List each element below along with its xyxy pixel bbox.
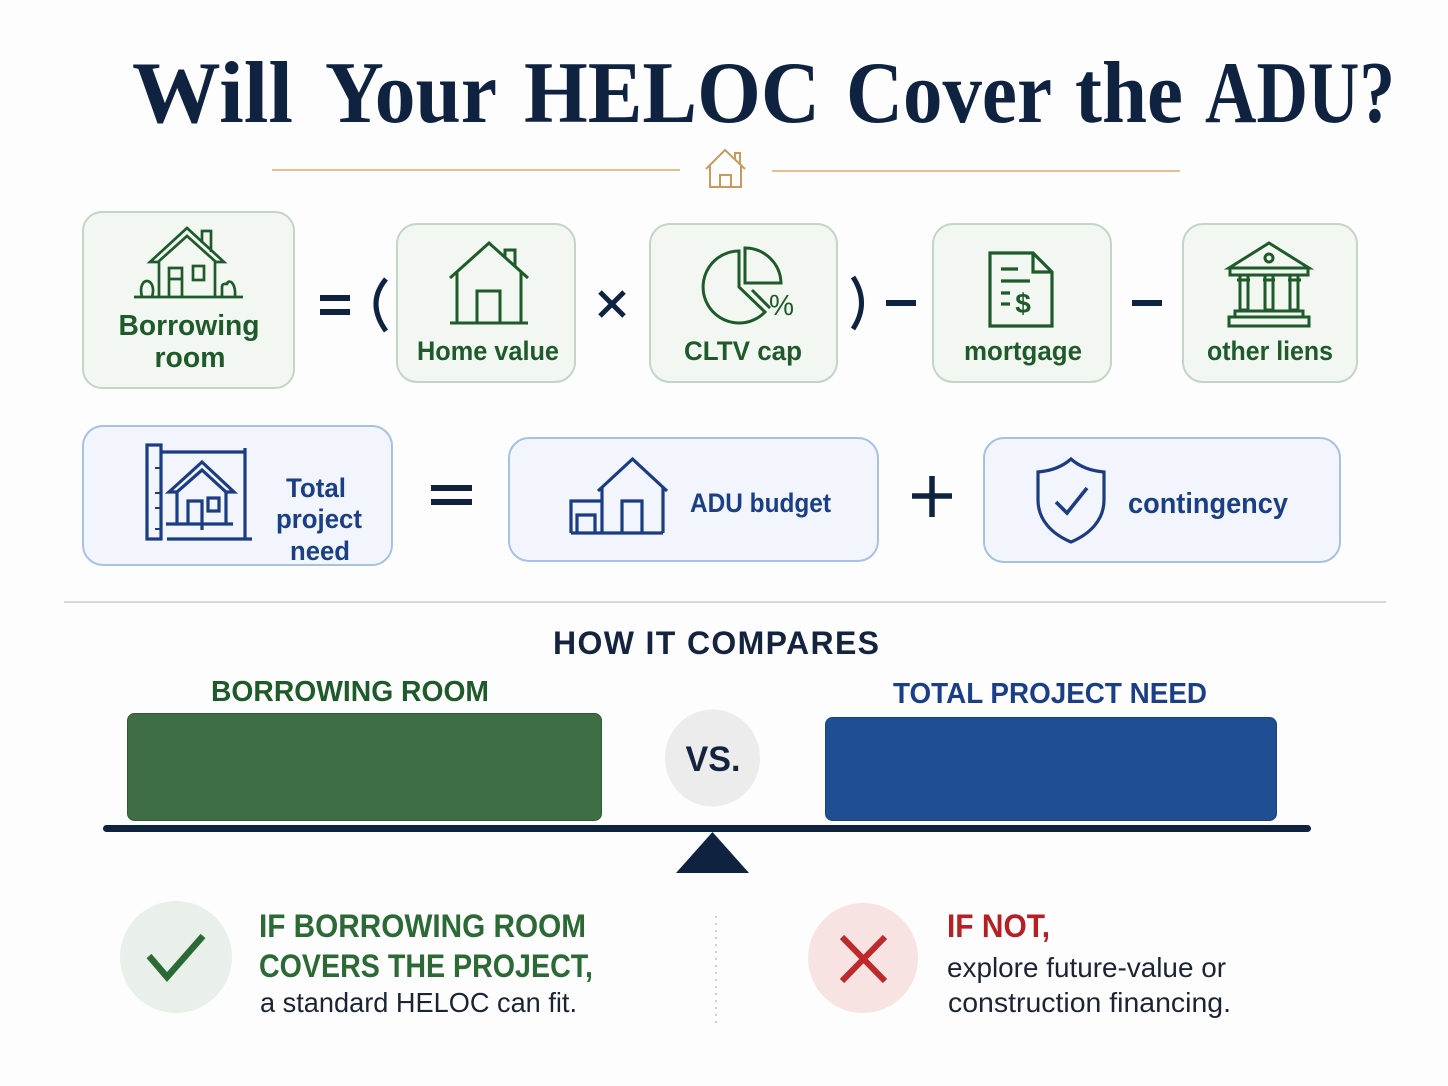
panel: borrowing room <box>83 212 294 388</box>
label: borrowing room: Borrowing <box>118 310 260 342</box>
label: mortgage: mortgage <box>964 336 1082 366</box>
heading: how it compares: HOW IT COMPARES <box>553 625 879 661</box>
icon: red x <box>808 903 918 1013</box>
label: other liens: other liens <box>1207 336 1333 366</box>
operator: multiply <box>600 292 624 316</box>
title <box>132 45 1395 142</box>
text: standard HELOC can fit <box>259 908 593 1018</box>
icon: house blueprint <box>147 445 252 539</box>
label: contingency: contingency <box>1128 488 1288 520</box>
text: standard HELOC can fit: a standard HELOC can fit. <box>260 987 577 1018</box>
title: Your <box>325 45 497 142</box>
label: ADU budget: ADU budget <box>690 488 831 518</box>
comparison: total project need bar: TOTAL PROJECT NEED <box>893 678 1207 710</box>
text: explore alternatives: IF NOT, <box>947 908 1050 944</box>
comparison: borrowing room bar: BORROWING ROOM <box>211 676 489 708</box>
text: standard HELOC can fit: IF BORROWING ROOM <box>259 908 586 944</box>
title: HELOC <box>524 45 820 142</box>
panel: ADU budget <box>509 438 878 561</box>
balance scale beam and fulcrum <box>103 825 1311 873</box>
comparison: vs badge <box>665 710 760 806</box>
title: the <box>1075 45 1183 142</box>
operator: minus <box>1132 300 1162 306</box>
label: home value: Home value <box>417 336 559 366</box>
comparison: vs badge: VS. <box>686 740 740 779</box>
panel: borrowing room: room <box>154 342 226 374</box>
text: explore alternatives <box>947 908 1231 1018</box>
panel: CLTV cap <box>650 224 837 382</box>
icon: pie chart with percent <box>703 248 794 323</box>
title: Will <box>132 45 293 142</box>
panel: total project need: project <box>276 504 362 534</box>
panel: total project need: need <box>290 536 350 566</box>
operator: plus <box>912 476 952 517</box>
icon: house with bushes <box>134 228 243 297</box>
operator: close parenthesis and minus <box>853 277 916 329</box>
operator: equals and open parenthesis <box>320 279 386 331</box>
label: total project need: Total <box>286 473 346 503</box>
text: explore alternatives: construction financing. <box>948 987 1231 1018</box>
panel: other liens <box>1183 224 1357 382</box>
operator: equals <box>431 485 472 505</box>
icon: mortgage document <box>990 253 1052 326</box>
icon: house <box>450 243 528 323</box>
label: CLTV cap: CLTV cap <box>684 336 802 366</box>
title: Cover <box>846 45 1052 142</box>
comparison: borrowing room bar <box>128 676 602 820</box>
comparison: total project need bar <box>826 678 1276 820</box>
outcome: if not <box>808 903 1231 1018</box>
outcome: borrowing room covers project <box>120 901 593 1018</box>
icon: pie chart with percent: % <box>769 290 794 322</box>
icon: shield with check <box>1038 459 1104 542</box>
icon: mortgage document: $ <box>1015 288 1031 319</box>
panel: total project need <box>83 426 392 566</box>
text: standard HELOC can fit: COVERS THE PROJECT, <box>259 948 593 984</box>
panel: home value <box>397 224 575 382</box>
text: explore alternatives: explore future-value or <box>947 952 1226 983</box>
icon: green check <box>120 901 232 1013</box>
icon: ADU house <box>571 459 667 533</box>
panel: contingency <box>984 438 1340 562</box>
panel: mortgage <box>933 224 1111 382</box>
icon: bank building <box>1229 243 1309 326</box>
title divider with house icon <box>272 150 1180 187</box>
title: ADU? <box>1205 45 1395 142</box>
